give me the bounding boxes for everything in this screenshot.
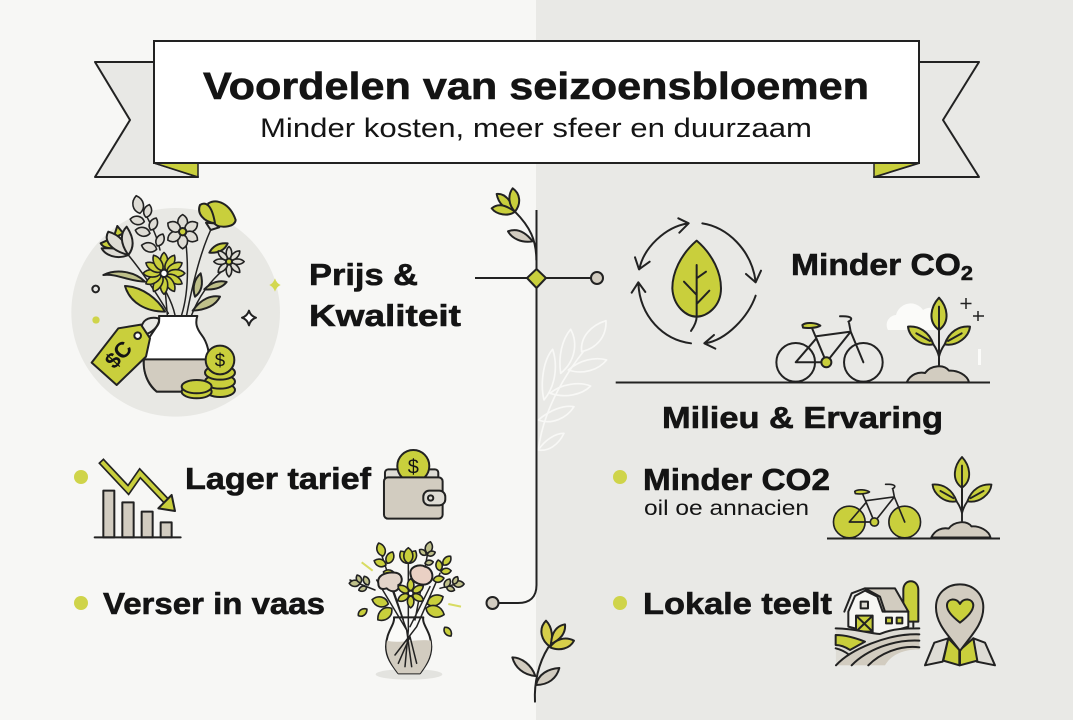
- decorative white leaf sprig: [538, 321, 607, 450]
- rose lime: [199, 201, 236, 230]
- leaf: [672, 241, 721, 331]
- bullet: minder CO2: [613, 470, 627, 484]
- sparkle plus signs: [960, 298, 984, 321]
- heading: Milieu & Ervaring: Milieu & Ervaring: [662, 400, 943, 435]
- heading: Minder CO2: 2: [961, 263, 973, 285]
- banner box: [154, 41, 919, 163]
- label: Verser in vaas: Verser in vaas: [103, 586, 325, 621]
- icon: wallet: $: [408, 456, 419, 478]
- heading: Prijs & Kwaliteit: Prijs &: [309, 257, 418, 292]
- icon: bicycle: [776, 316, 883, 382]
- price tag: [92, 318, 159, 385]
- icon: wallet: [384, 450, 445, 519]
- label: Lager tarief: Lager tarief: [185, 461, 372, 496]
- panel: minder CO2 illustration: [632, 218, 761, 349]
- banner ribbon: [95, 41, 979, 177]
- daisy beige top: [165, 215, 200, 249]
- daisy lime: [143, 252, 185, 294]
- daisy beige right: [214, 246, 244, 277]
- tulip: [101, 226, 133, 257]
- white accent bar: [978, 349, 981, 365]
- heading: Minder CO2: Minder CO: [791, 247, 948, 282]
- icon: falling price chart: [95, 463, 181, 537]
- panel: prijs en kwaliteit illustration: [71, 195, 281, 417]
- vase: [144, 316, 210, 392]
- ground line: [616, 382, 990, 384]
- subtitle: Minder kosten, meer sfeer en duurzaam: [260, 113, 812, 143]
- central connector lines: [475, 210, 591, 603]
- icon: bottom sprig: [512, 621, 574, 702]
- sparkles: [92, 286, 99, 292]
- coins: [182, 346, 235, 398]
- icon: white cloud: [887, 303, 942, 330]
- background circle: [71, 208, 280, 417]
- icon: sprout small: [931, 457, 991, 537]
- recycling arrows: [632, 218, 761, 349]
- bullet: lokale teelt: [613, 596, 627, 610]
- heading: Prijs & Kwaliteit: [309, 257, 461, 333]
- icon: bicycle lime: [833, 484, 921, 538]
- ribbon left fold: [154, 163, 198, 177]
- branch leaves: [129, 195, 166, 254]
- bullet: lager tarief: [74, 470, 88, 484]
- title: Voordelen van seizoensbloemen: [203, 66, 869, 108]
- ribbon right tail: [874, 62, 979, 177]
- icon: barn and silo: [836, 581, 919, 665]
- ground line small: [827, 538, 1000, 540]
- label: Lokale teelt: Lokale teelt: [643, 586, 832, 621]
- icon: top sprig: [492, 188, 536, 260]
- connector node diamond: [527, 269, 546, 288]
- sublabel: oil oe annacien: [644, 497, 809, 520]
- icon: bouquet in vase: [349, 541, 464, 680]
- connector node right: [591, 272, 603, 284]
- label: Minder CO2: Minder CO2: [643, 462, 830, 497]
- icon: sprout: [907, 298, 970, 382]
- coins: $: [215, 350, 226, 371]
- connector node bottom: [486, 597, 498, 609]
- icon: map pin with heart: [925, 584, 995, 665]
- leaves: [103, 272, 145, 282]
- ribbon right fold: [874, 163, 919, 177]
- bullet: verser in vaas: [74, 596, 88, 610]
- stems: [128, 203, 223, 315]
- price tag: $C: [100, 336, 137, 373]
- heading: Prijs & Kwaliteit: Kwaliteit: [309, 298, 461, 333]
- ribbon left tail: [95, 62, 198, 177]
